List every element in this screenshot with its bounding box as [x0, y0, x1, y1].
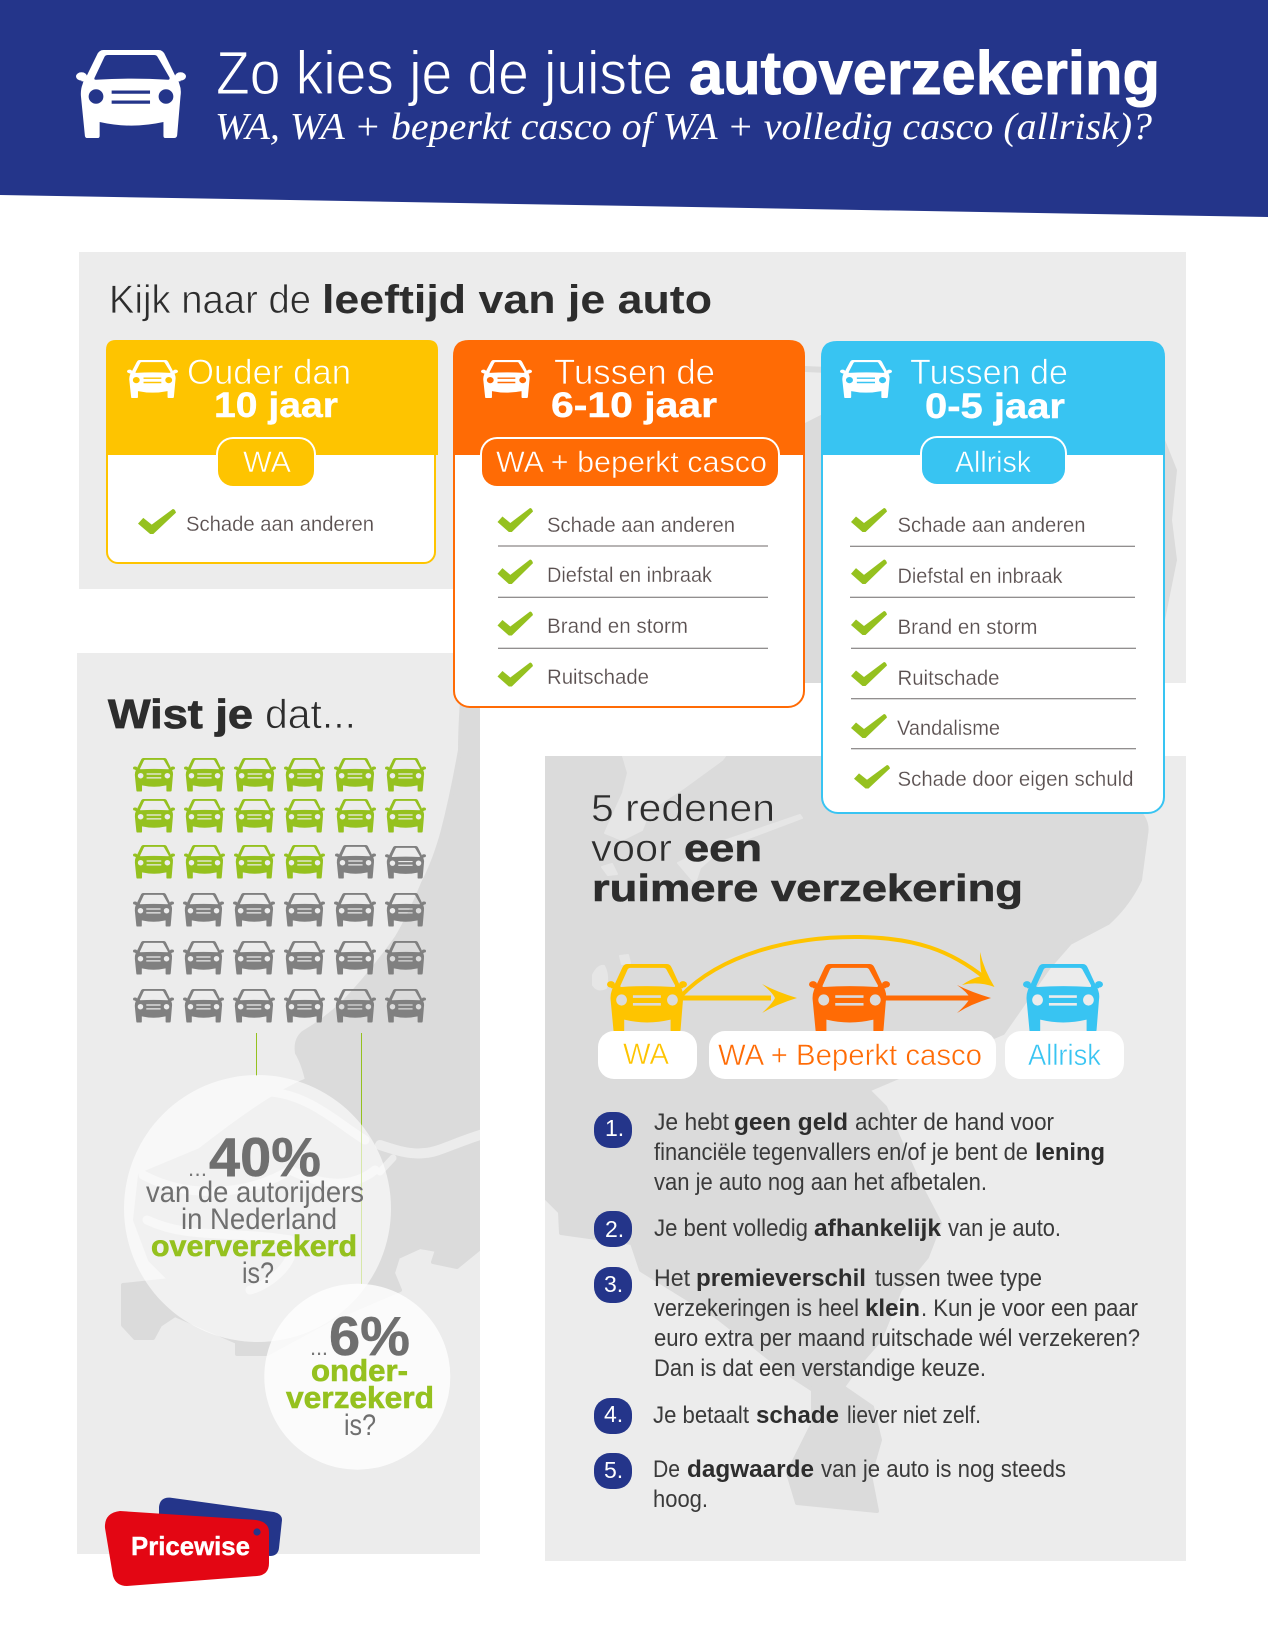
- heading: leeftijd: Kijk naar de: [109, 278, 311, 322]
- reason 5: van je auto is nog steeds: [821, 1456, 1066, 1483]
- panel: wist je dat: [77, 653, 490, 1554]
- arrow: WA to allrisk: [681, 937, 994, 996]
- card heading: Tussen de: [910, 353, 1068, 392]
- icon: car: [840, 360, 892, 398]
- list: coverage: Vandalisme: [897, 717, 1000, 740]
- card heading: 0-5 jaar: [925, 387, 1065, 426]
- reason 3: klein: [865, 1295, 920, 1322]
- reason 2: afhankelijk: [814, 1215, 942, 1242]
- reason 4: Je betaalt: [653, 1402, 749, 1429]
- badge: Allrisk: [920, 436, 1067, 486]
- reason 4: [594, 1398, 981, 1434]
- logo: Pricewise: Pricewise: [131, 1531, 250, 1561]
- item: schade aan anderen: [138, 509, 374, 536]
- callout: 40 percent: in Nederland: [181, 1203, 337, 1236]
- label: WA + Beperkt casco: [709, 1031, 996, 1079]
- card heading: [551, 353, 717, 425]
- badge: WA: [216, 437, 316, 487]
- reason 3: premieverschil: [696, 1265, 866, 1292]
- card heading: 10 jaar: [214, 386, 338, 425]
- reason 3: [594, 1265, 1140, 1382]
- list: coverage: Ruitschade: [898, 667, 1000, 690]
- logo: Pricewise: [105, 1498, 282, 1586]
- heading: leeftijd: [109, 278, 712, 322]
- reason 1: [594, 1109, 1105, 1196]
- icon grid: cars: [133, 758, 426, 1022]
- panel: 5 redenen: [545, 756, 1186, 1561]
- item: schade aan anderen: Schade aan anderen: [186, 513, 374, 536]
- card heading: Ouder dan: [187, 353, 351, 392]
- arrow: beperkt casco to allrisk: [883, 985, 991, 1013]
- panel: leeftijd background: [79, 252, 1186, 683]
- label: Allrisk: [1005, 1031, 1124, 1079]
- card heading: [187, 353, 351, 425]
- icon: orange car: [809, 964, 890, 1032]
- reason 3: . Kun je voor een paar: [921, 1295, 1138, 1322]
- list: coverage: Schade aan anderen: [898, 514, 1086, 537]
- label: WA: [598, 1031, 697, 1079]
- heading: wist je dat: dat...: [265, 691, 356, 737]
- heading: 5 redenen: ruimere verzekering: [592, 868, 1023, 910]
- callout: 6 percent: ...: [310, 1335, 328, 1360]
- reason 4: 4.: [604, 1401, 623, 1427]
- list: coverage: Schade aan anderen: [547, 514, 735, 537]
- reason 1: financiële tegenvallers en/of je bent de: [654, 1139, 1028, 1166]
- reason 1: 1.: [605, 1115, 624, 1141]
- header banner: [0, 0, 1268, 217]
- reason 3: Dan is dat een verstandige keuze.: [654, 1355, 986, 1382]
- label: Allrisk: Allrisk: [1028, 1039, 1102, 1072]
- callout: 6 percent: onder-: [311, 1353, 408, 1388]
- reason 1: van je auto nog aan het afbetalen.: [654, 1169, 987, 1196]
- reason 1: lening: [1035, 1139, 1105, 1166]
- title: autoverzekering: [689, 39, 1160, 107]
- reason 2: [594, 1211, 1061, 1247]
- label: WA + Beperkt casco: WA + Beperkt casco: [718, 1039, 982, 1072]
- badge: Allrisk: Allrisk: [955, 446, 1032, 479]
- diagram: upgrade arrows: [598, 937, 1124, 1079]
- heading: 5 redenen: 5 redenen: [591, 788, 775, 830]
- label: WA: WA: [623, 1038, 669, 1071]
- reason 3: Het: [654, 1265, 690, 1292]
- heading: 5 redenen: een: [684, 828, 762, 870]
- callout: 40 percent: is?: [242, 1257, 274, 1290]
- reason 3: euro extra per maand ruitschade wél verzekeren?: [654, 1325, 1140, 1352]
- list: coverage: Brand en storm: [898, 616, 1038, 639]
- callout: 6 percent: [264, 1284, 450, 1470]
- reason 4: schade: [756, 1402, 839, 1429]
- callout: 6 percent: is?: [344, 1409, 376, 1442]
- reason 3: tussen twee type: [875, 1265, 1042, 1292]
- arrow: WA to beperkt casco: [681, 984, 797, 1013]
- heading: wist je dat: [108, 691, 356, 737]
- card heading: 6-10 jaar: [551, 386, 717, 425]
- list: coverage: Schade door eigen schuld: [898, 768, 1134, 791]
- card heading: Tussen de: [554, 353, 715, 392]
- callout: 40 percent: ...: [188, 1156, 207, 1181]
- reason 2: Je bent volledig: [654, 1215, 808, 1242]
- callout: 40 percent: van de autorijders: [146, 1176, 364, 1209]
- list: coverage: [498, 508, 768, 689]
- list: reasons: [594, 1109, 1140, 1513]
- reason 3: 3.: [604, 1271, 623, 1297]
- reason 4: liever niet zelf.: [847, 1402, 981, 1429]
- list: coverage: [850, 508, 1136, 791]
- callout: 6 percent: verzekerd: [286, 1380, 434, 1415]
- list: coverage: Diefstal en inbraak: [547, 564, 712, 587]
- card: ouder dan 10 jaar: [106, 340, 438, 563]
- badge: WA: WA: [243, 446, 291, 479]
- reason 1: achter de hand voor: [855, 1109, 1054, 1136]
- reason 1: Je hebt: [654, 1109, 729, 1136]
- icon: blue car: [1023, 964, 1103, 1032]
- card: tussen 0-5 jaar: [821, 341, 1165, 813]
- badge: WA + beperkt casco: WA + beperkt casco: [496, 446, 767, 479]
- list: coverage: Ruitschade: [547, 666, 649, 689]
- icon: header car: [76, 50, 186, 138]
- reason 5: De: [653, 1456, 680, 1483]
- heading: 5 redenen: [591, 788, 1023, 910]
- icon: car: [481, 360, 532, 398]
- reason 5: hoog.: [653, 1486, 708, 1513]
- title: [216, 39, 1160, 107]
- title: Zo kies je de juiste: [216, 39, 673, 107]
- reason 5: [594, 1453, 1066, 1513]
- callout: 40 percent: oververzekerd: [151, 1230, 357, 1263]
- reason 5: 5.: [604, 1457, 623, 1483]
- callout: 40 percent: 40%: [209, 1126, 321, 1188]
- icon: yellow car: [607, 964, 687, 1032]
- icon: car: [127, 360, 178, 398]
- reason 2: van je auto.: [948, 1215, 1061, 1242]
- reason 1: geen geld: [734, 1109, 848, 1136]
- reason 3: verzekeringen is heel: [654, 1295, 859, 1322]
- heading: leeftijd: leeftijd van je auto: [322, 278, 712, 322]
- badge: WA + beperkt casco: [480, 437, 780, 487]
- subtitle: WA, WA + beperkt casco of WA + volledig casco (allrisk)?: [215, 106, 1152, 148]
- card: tussen 6-10 jaar: [453, 340, 805, 707]
- callout: 40 percent: [124, 1075, 391, 1342]
- list: coverage: Brand en storm: [547, 615, 688, 638]
- list: coverage: Diefstal en inbraak: [898, 565, 1063, 588]
- callout: 6 percent: 6%: [329, 1305, 410, 1367]
- heading: wist je dat: Wist je: [108, 691, 253, 737]
- card heading: [910, 353, 1068, 426]
- reason 2: 2.: [605, 1216, 624, 1242]
- reason 5: dagwaarde: [687, 1456, 814, 1483]
- heading: 5 redenen: voor: [591, 828, 672, 870]
